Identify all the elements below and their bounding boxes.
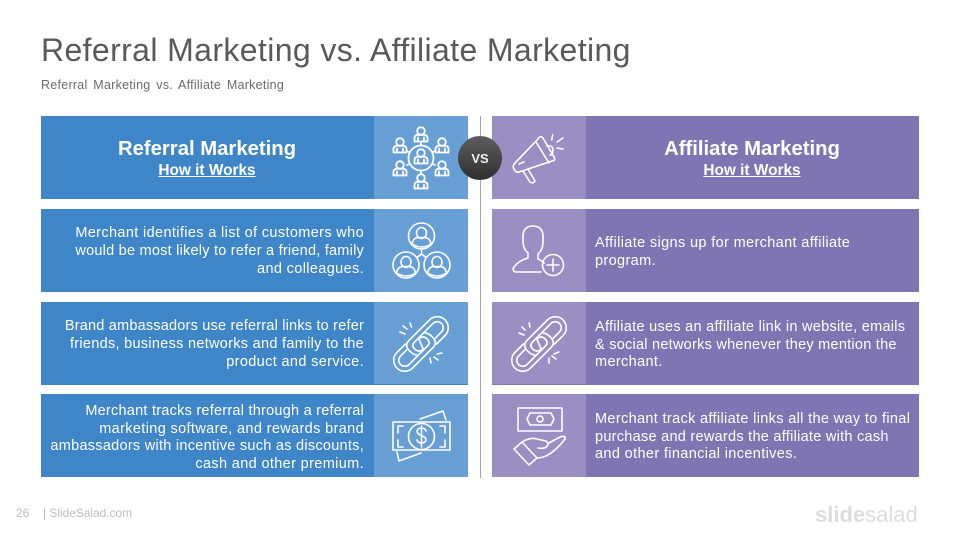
referral heading — [118, 138, 296, 179]
panel: affiliate step 1 — [492, 209, 919, 292]
affiliate heading — [664, 138, 840, 179]
panel: referral step 3 — [41, 394, 468, 477]
affiliate step 1 text — [595, 235, 850, 269]
icon tile: referral step 3 — [374, 394, 468, 477]
referral step 3 text — [50, 403, 364, 472]
icon: megaphone — [513, 135, 563, 183]
icon: referral network — [394, 127, 448, 188]
icon: cash — [393, 411, 450, 461]
affiliate heading: How it Works — [703, 162, 801, 179]
referral step 3 text: Merchant tracks referral through a referral — [85, 403, 364, 419]
affiliate step 2 text — [595, 319, 905, 370]
affiliate step 3 text — [595, 411, 910, 462]
icon tile: referral step 1 — [374, 209, 468, 292]
affiliate heading: Affiliate Marketing — [664, 138, 840, 160]
referral step 2 text — [65, 318, 364, 370]
icon tile: referral network — [374, 116, 468, 199]
vs badge: VS — [471, 151, 489, 166]
icon: add user — [513, 226, 564, 276]
icon: referral link — [389, 312, 453, 376]
affiliate step 2 text: merchant. — [595, 354, 663, 370]
icon: referral customers — [393, 223, 450, 278]
icon tile: affiliate step 2 — [492, 302, 586, 384]
affiliate step 1 text: Affiliate signs up for merchant affiliate — [595, 235, 850, 251]
affiliate step 3 text: purchase and rewards the affiliate with cash — [595, 429, 889, 445]
footer text: | SlideSalad.com — [43, 506, 132, 520]
referral heading: How it Works — [158, 162, 256, 179]
referral step 1 text: and colleagues. — [257, 261, 364, 277]
referral step 1 text: would be most likely to refer a friend, family — [75, 243, 364, 259]
icon tile: affiliate megaphone — [492, 116, 586, 199]
icon: affiliate link — [507, 312, 571, 376]
title: Referral Marketing vs. Affiliate Marketing — [41, 32, 631, 68]
referral step 2 text: product and service. — [226, 354, 364, 370]
logo: slidesalad — [815, 502, 918, 527]
panel: affiliate step 3 — [492, 394, 919, 477]
referral heading: Referral Marketing — [118, 138, 296, 160]
vs badge — [458, 136, 502, 180]
panel: affiliate step 2 — [492, 302, 919, 385]
affiliate step 1 text: program. — [595, 253, 656, 269]
panel: referral step 1 — [41, 209, 468, 292]
referral step 2 text: friends, business networks and family to the — [70, 336, 364, 352]
affiliate step 2 text: & social networks whenever they mention the — [595, 337, 897, 353]
icon tile: affiliate step 1 — [492, 209, 586, 292]
icon: money in hand — [514, 408, 565, 465]
referral step 2 text: Brand ambassadors use referral links to refer — [65, 318, 364, 334]
panel: referral step 2 — [41, 302, 468, 385]
panel: referral header — [41, 116, 468, 199]
referral step 3 text: ambassadors with incentive such as discounts, — [50, 438, 364, 454]
referral step 3 text: cash and other premium. — [195, 456, 364, 472]
subtitle: Referral Marketing vs. Affiliate Marketing — [41, 78, 284, 92]
panel: affiliate header — [492, 116, 919, 199]
referral step 1 text: Merchant identifies a list of customers who — [75, 225, 364, 241]
affiliate step 3 text: and other financial incentives. — [595, 446, 797, 462]
referral step 1 text — [75, 225, 364, 277]
affiliate step 3 text: Merchant track affiliate links all the way to final — [595, 411, 910, 427]
icon tile: referral step 2 — [374, 302, 468, 384]
referral step 3 text: marketing software, and rewards brand — [99, 421, 364, 437]
page number: 26 — [16, 506, 29, 520]
affiliate step 2 text: Affiliate uses an affiliate link in website, emails — [595, 319, 905, 335]
icon tile: affiliate step 3 — [492, 394, 586, 477]
center divider — [480, 116, 481, 478]
